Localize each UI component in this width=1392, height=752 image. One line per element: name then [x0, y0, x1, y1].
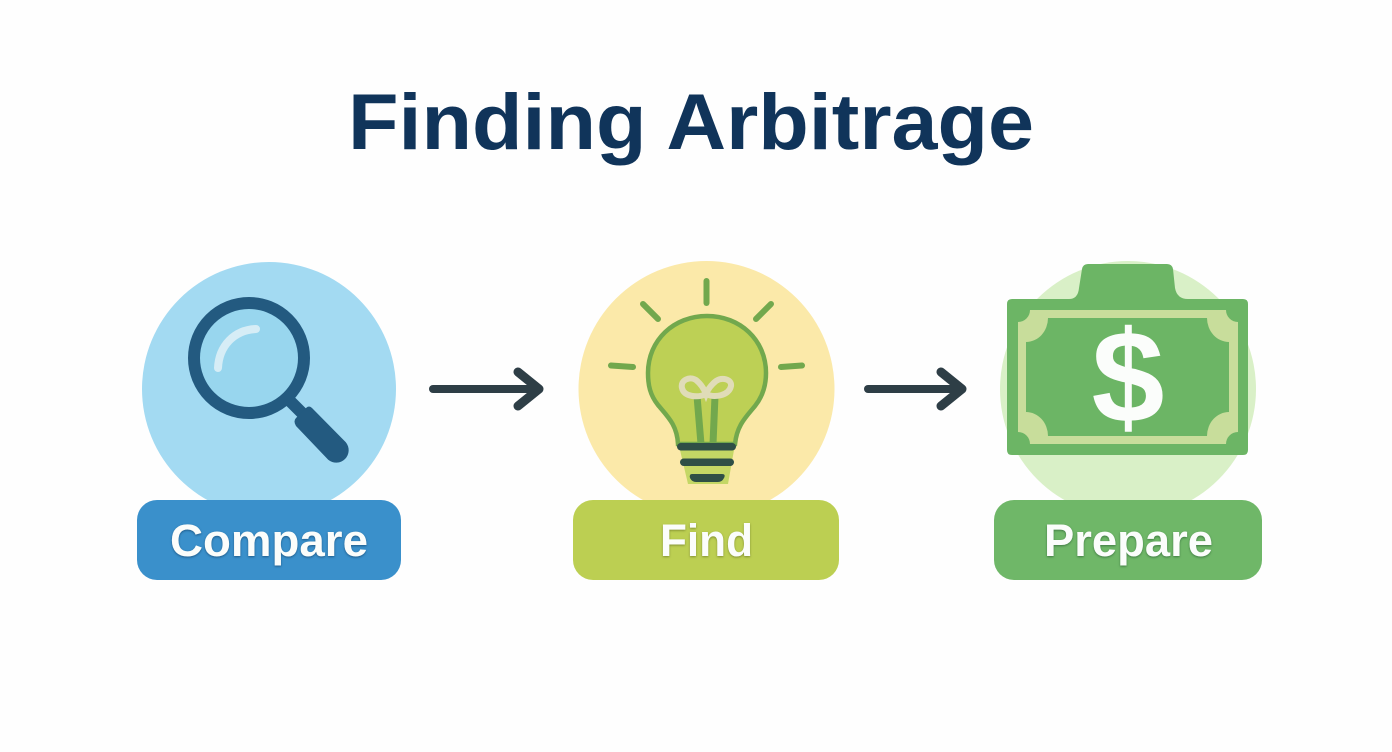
step: find — [573, 261, 839, 580]
dollar sign: $ — [1092, 303, 1164, 450]
icon: magnifying glass — [194, 303, 349, 463]
arrow: compare to find — [433, 372, 539, 406]
label pill: prepare — [994, 500, 1262, 580]
label pill: prepare: Prepare — [1044, 515, 1213, 566]
rays — [611, 281, 802, 367]
icon: banknote — [1007, 264, 1248, 455]
icon: light bulb — [611, 281, 802, 484]
bulb base — [680, 450, 734, 484]
label pill: find: Find — [660, 515, 753, 566]
label pill: compare: Compare — [170, 515, 368, 566]
label pill: find — [573, 500, 839, 580]
arrow: find to prepare — [868, 372, 962, 406]
step: compare — [137, 262, 401, 580]
filament — [682, 378, 731, 444]
icon background: blue circle — [142, 262, 396, 516]
icon background: yellow circle — [578, 261, 834, 517]
icon background: pale green circle — [1000, 261, 1256, 517]
title: Finding Arbitrage — [348, 77, 1034, 166]
step: prepare — [994, 261, 1262, 580]
label pill: compare — [137, 500, 401, 580]
